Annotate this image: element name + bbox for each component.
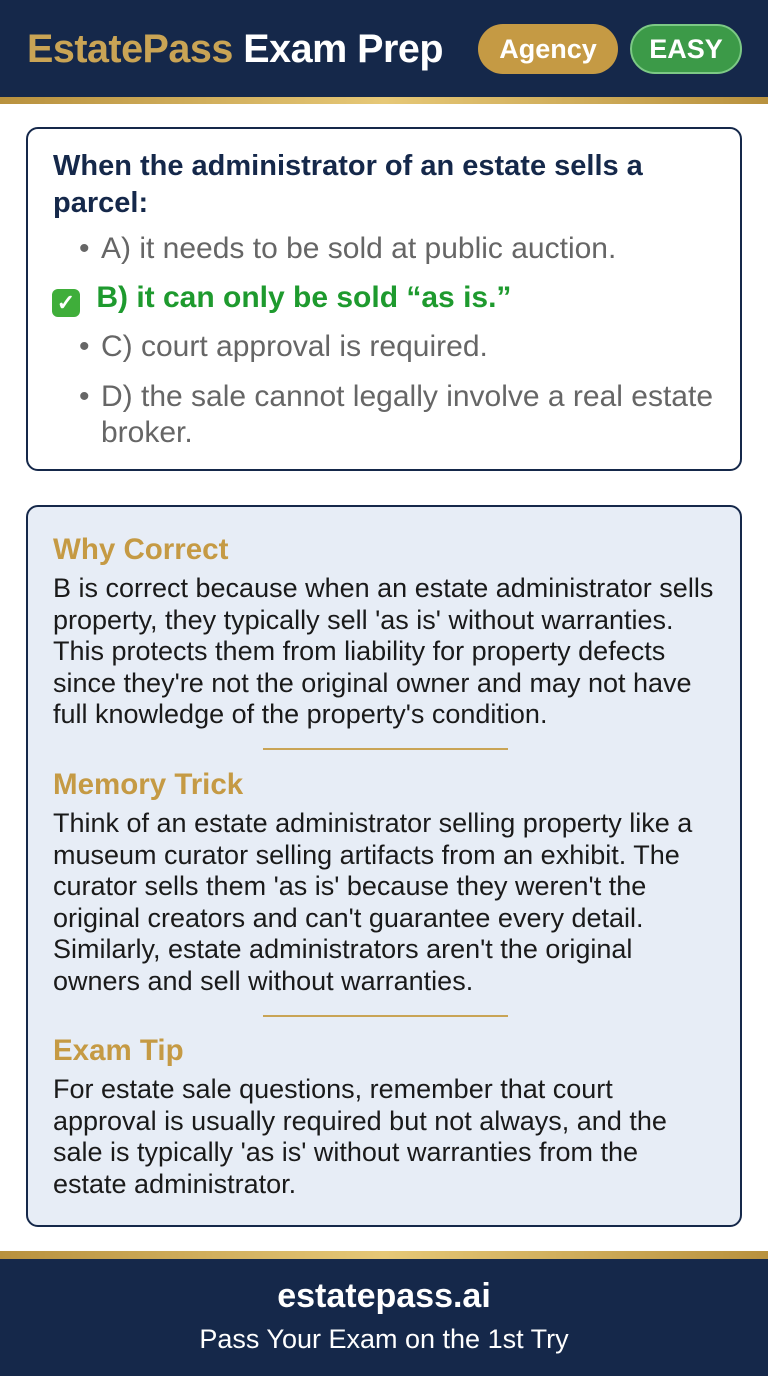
text: memory trick: original creators and can't guarantee every detail. xyxy=(53,902,644,932)
text: memory trick: Think of an estate administrator selling property like a xyxy=(53,808,692,838)
text: memory trick: curator sells them 'as is' because they weren't the xyxy=(53,871,646,901)
footer tagline: Pass Your Exam on the 1st Try xyxy=(199,1324,569,1354)
text: memory trick: owners and sell without warranties. xyxy=(53,966,473,996)
option A: A) it needs to be sold at public auction. xyxy=(101,232,616,265)
text: why correct: since they're not the original owner and may not have xyxy=(53,668,692,698)
text: why correct xyxy=(53,573,713,729)
panel: question: • xyxy=(79,232,90,265)
text: why correct: This protects them from liability for property defects xyxy=(53,636,665,666)
option D xyxy=(79,380,713,449)
option D: D) the sale cannot legally involve a real estate xyxy=(101,380,713,413)
panel: question xyxy=(26,127,742,471)
footer site name: estatepass.ai xyxy=(277,1277,491,1315)
heading: Exam Tip: Exam Tip xyxy=(53,1034,184,1067)
title: EstatePass Exam Prep xyxy=(27,27,443,71)
header bar xyxy=(0,0,768,98)
text: why correct: full knowledge of the property's condition. xyxy=(53,699,547,729)
option D: broker. xyxy=(101,416,193,449)
panel: question: • xyxy=(79,330,90,363)
text: exam tip: For estate sale questions, remember that court xyxy=(53,1074,613,1104)
text: why correct: B is correct because when an estate administrator sells xyxy=(53,573,713,603)
option B correct: B) it can only be sold “as is.” xyxy=(96,281,511,314)
panel: explanation xyxy=(26,505,742,1227)
text: memory trick: museum curator selling artifacts from an exhibit. The xyxy=(53,840,680,870)
badge: EASY xyxy=(630,24,742,74)
text: exam tip: approval is usually required but not always, and the xyxy=(53,1106,667,1136)
footer xyxy=(0,1259,768,1376)
text: why correct: property, they typically sell 'as is' without warranties. xyxy=(53,604,674,634)
question text: parcel: xyxy=(53,187,148,219)
text: exam tip: estate administrator. xyxy=(53,1168,296,1198)
text: exam tip: sale is typically 'as is' without warranties from the xyxy=(53,1137,638,1167)
text: memory trick xyxy=(53,808,692,996)
badge: Agency xyxy=(478,24,618,74)
panel: question: • xyxy=(79,380,90,413)
text: exam tip xyxy=(53,1074,667,1198)
option C: C) court approval is required. xyxy=(101,330,488,363)
badge: Agency: Agency xyxy=(499,34,597,64)
question text: When the administrator of an estate sells a xyxy=(53,150,643,182)
heading: Why Correct: Why Correct xyxy=(53,533,228,566)
badge: EASY: EASY xyxy=(649,34,723,64)
heading: Memory Trick: Memory Trick xyxy=(53,768,243,801)
option B correct: ✓ xyxy=(57,290,75,315)
question text xyxy=(53,150,643,219)
text: memory trick: Similarly, estate administrators aren't the original xyxy=(53,934,632,964)
